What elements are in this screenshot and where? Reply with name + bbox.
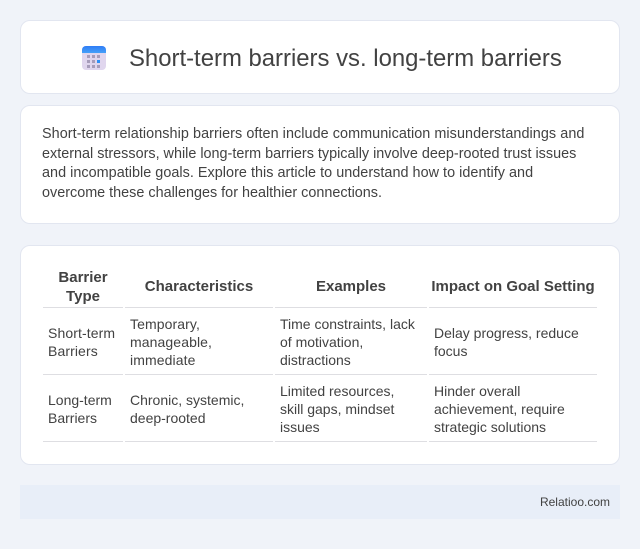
row 1: examples [280, 316, 415, 368]
row 1: characteristics: Temporary, [130, 316, 200, 332]
row 2: barrier type [48, 392, 112, 426]
footer bar [20, 485, 620, 519]
row 2: characteristics [130, 392, 244, 426]
table header: Examples: Examples [316, 278, 386, 295]
icon: calendar [82, 46, 106, 70]
intro paragraph: overcome these challenges for healthier connections. [42, 184, 382, 200]
row 2: characteristics: Chronic, systemic, [130, 392, 244, 408]
row 1: barrier type: Short-term [48, 325, 115, 341]
table header: Barrier Type [58, 269, 108, 305]
intro paragraph [42, 126, 584, 200]
intro paragraph: and incompatible goals. Explore this article to understand how to identify and [42, 165, 533, 181]
table panel [20, 245, 620, 465]
row 2: barrier type: Barriers [48, 410, 97, 426]
row 1: impact: focus [434, 343, 467, 359]
footer credit: Relatioo.com [540, 495, 610, 509]
row 2: examples: Limited resources, [280, 383, 394, 399]
row 1: characteristics [130, 316, 212, 368]
table header: Characteristics: Characteristics [145, 278, 253, 295]
title: Short-term barriers vs. long-term barriers [129, 45, 562, 72]
row 1: barrier type: Barriers [48, 343, 98, 359]
intro text panel [20, 105, 620, 224]
row 2: impact [434, 383, 565, 435]
table header: Barrier Type: Barrier [58, 269, 108, 286]
row 2: characteristics: deep-rooted [130, 410, 206, 426]
table header: Barrier Type: Type [66, 288, 100, 305]
row 2: examples: issues [280, 419, 320, 435]
row 2: impact: strategic solutions [434, 419, 546, 435]
intro paragraph: Short-term relationship barriers often include communication misunderstandings and [42, 126, 584, 142]
row 2: examples: skill gaps, mindset [280, 401, 394, 417]
row 2: impact: achievement, require [434, 401, 565, 417]
table header: Impact on Goal Setting: Impact on Goal Setting [431, 278, 595, 295]
row 1: impact [434, 325, 579, 359]
row 1: examples: of motivation, [280, 334, 363, 350]
row 2: impact: Hinder overall [434, 383, 520, 399]
row 2: examples [280, 383, 394, 435]
intro paragraph: external stressors, while long-term barriers typically involve deep-rooted trust issues [42, 146, 576, 162]
row 1: characteristics: manageable, [130, 334, 212, 350]
row 2: barrier type: Long-term [48, 392, 112, 408]
row 1: impact: Delay progress, reduce [434, 325, 579, 341]
row 1: examples: distractions [280, 352, 351, 368]
row 1: characteristics: immediate [130, 352, 195, 368]
header panel [20, 20, 620, 94]
row 1: barrier type [48, 325, 115, 359]
row 1: examples: Time constraints, lack [280, 316, 415, 332]
